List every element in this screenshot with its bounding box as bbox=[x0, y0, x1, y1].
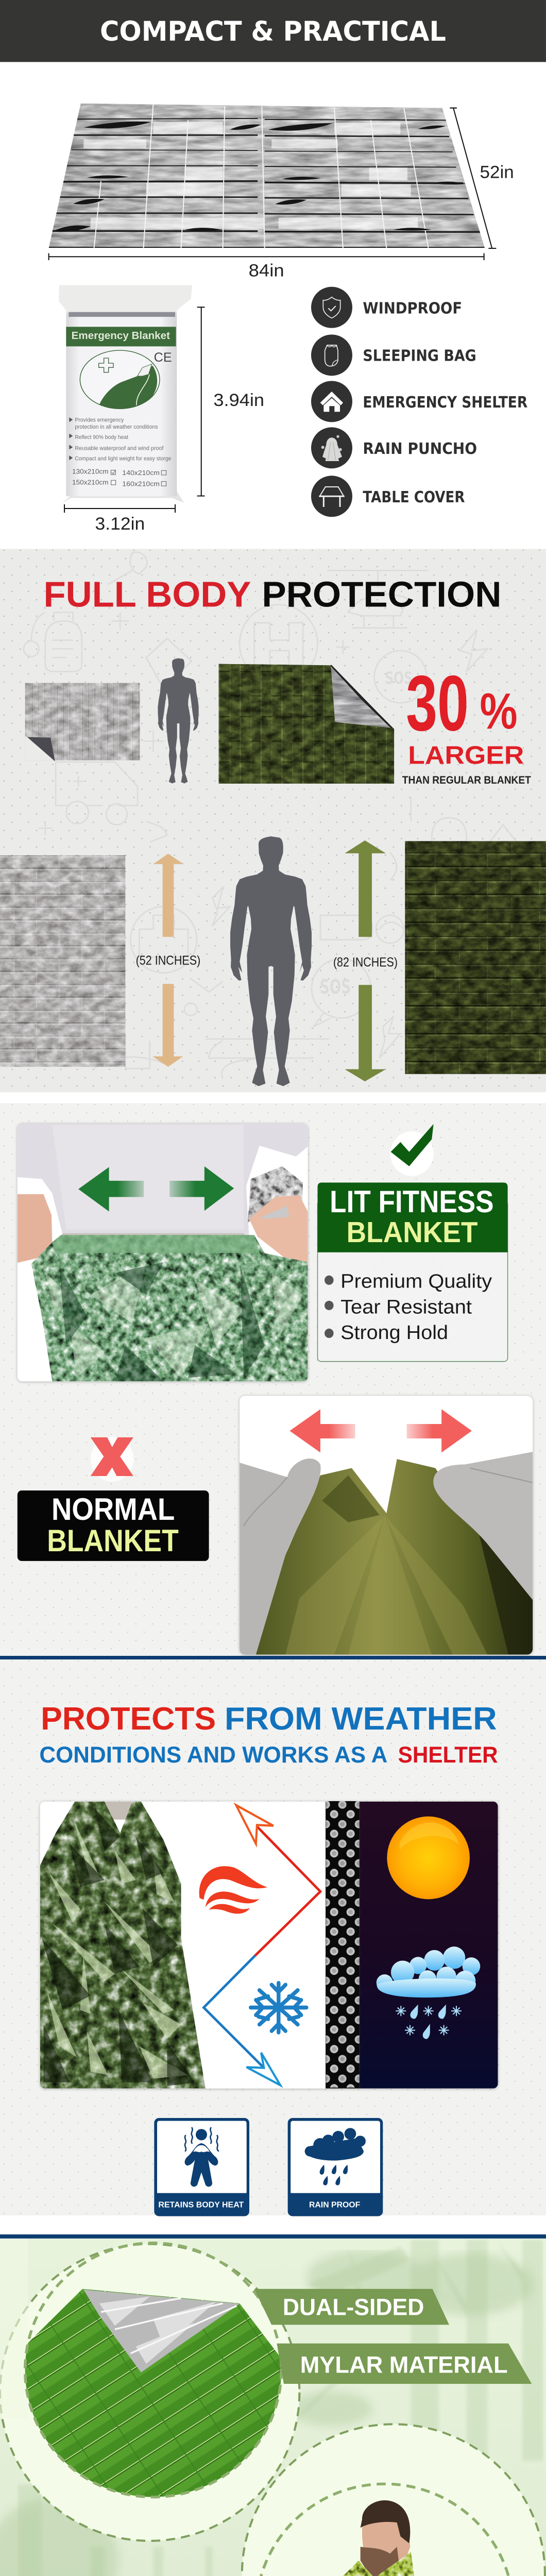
icon: shield bbox=[311, 287, 352, 328]
package title: Emergency Blanket bbox=[72, 330, 170, 342]
header bar bbox=[0, 0, 546, 62]
icons: benefit badges bbox=[154, 2118, 383, 2216]
feature labels: SLEEPING BAG bbox=[363, 347, 476, 365]
icon: sleeping bag bbox=[311, 334, 352, 376]
arrow: red left bbox=[289, 1409, 355, 1452]
ribbon: dual-sided bbox=[254, 2289, 449, 2325]
panel: reflective layer diagram bbox=[40, 1802, 498, 2089]
forest backdrop bbox=[18, 2240, 543, 2576]
arrow: green right bbox=[169, 1166, 234, 1211]
callout: 30 percent larger bbox=[402, 660, 531, 786]
dimension: 52in bbox=[450, 108, 514, 248]
icon: person small bbox=[158, 658, 199, 784]
arrow: red right bbox=[407, 1409, 472, 1452]
feature labels bbox=[363, 299, 527, 506]
section: mylar material bbox=[0, 2239, 546, 2576]
label: normal blanket bbox=[18, 1490, 209, 1561]
package bullets bbox=[69, 417, 171, 462]
dimension: 3.94in bbox=[197, 307, 264, 496]
package sizes: 150x210cm bbox=[72, 479, 109, 486]
package bullets: Compact and light weight for easy storge bbox=[75, 455, 171, 462]
heading bbox=[43, 574, 501, 615]
package bullets: Provides emergency bbox=[75, 417, 124, 423]
package sizes: 130x210cm bbox=[72, 467, 109, 475]
icon: rain poncho bbox=[311, 427, 352, 468]
section: full body protection: SOS bbox=[385, 668, 413, 688]
badge: rain proof: RAIN PROOF bbox=[309, 2200, 361, 2209]
heading: FULL BODY bbox=[43, 574, 251, 615]
icon: sun bbox=[387, 1817, 470, 1899]
icon: house bbox=[311, 381, 352, 422]
section: strength comparison bbox=[0, 1103, 546, 1656]
dimension: 52in: 52in bbox=[480, 162, 514, 182]
ribbon: mylar material bbox=[277, 2344, 532, 2384]
callout: 30 percent larger: % bbox=[480, 683, 518, 739]
heading: FROM WEATHER bbox=[225, 1701, 497, 1736]
feature bullets: Strong Hold bbox=[340, 1321, 448, 1343]
badge: rain proof bbox=[288, 2118, 383, 2216]
arrow: tan height arrow bbox=[152, 854, 183, 1067]
heading: lit fitness: LIT FITNESS bbox=[330, 1184, 494, 1219]
icon: person large bbox=[230, 836, 312, 1086]
arrow: green left bbox=[78, 1167, 144, 1211]
package illustration: CE bbox=[154, 350, 172, 365]
icon: check mark bbox=[390, 1124, 434, 1176]
callout: 30 percent larger: 30 bbox=[406, 660, 469, 748]
section: weather protection bbox=[0, 1659, 546, 2215]
heading: PROTECTS bbox=[41, 1701, 216, 1736]
icon: snowflake bbox=[251, 1983, 306, 2032]
label: normal blanket: NORMAL bbox=[52, 1492, 175, 1527]
dimension: 84in bbox=[49, 253, 484, 281]
package sizes: 160x210cm bbox=[122, 480, 160, 487]
photo: gloves pulling normal blanket bbox=[240, 1396, 533, 1655]
feature labels: TABLE COVER bbox=[363, 488, 465, 506]
green blanket large bbox=[405, 841, 546, 1074]
icon: cloud with snow and rain bbox=[377, 1946, 480, 2039]
arrow: green height arrow bbox=[345, 840, 386, 1081]
reflective dotted layer bbox=[326, 1802, 360, 2089]
feature bullets: Tear Resistant bbox=[340, 1296, 472, 1317]
feature bullets: Premium Quality bbox=[340, 1270, 492, 1292]
callout: 30 percent larger: THAN REGULAR BLANKET bbox=[402, 774, 531, 786]
feature labels: WINDPROOF bbox=[363, 299, 462, 317]
silver blanket large bbox=[0, 855, 125, 1067]
package sizes bbox=[72, 467, 166, 487]
package bullets: Reflect 90% body heat bbox=[75, 434, 128, 440]
photo: dual sided blanket close-up bbox=[21, 2243, 283, 2502]
feature bullets bbox=[325, 1270, 492, 1343]
package bullets: protection in all weather conditions bbox=[75, 424, 158, 430]
package illustration bbox=[80, 350, 172, 411]
arrow: cold reflected bbox=[203, 1956, 280, 2085]
dashed outer shape bbox=[0, 2244, 545, 2576]
section: full body protection bbox=[0, 549, 546, 1092]
section: compact and practical bbox=[0, 0, 546, 549]
dimension: 3.94in: 3.94in bbox=[213, 391, 264, 410]
dimension: 3.12in bbox=[64, 504, 175, 534]
label: 82 inches: (82 INCHES) bbox=[333, 955, 398, 970]
heading: PROTECTION bbox=[262, 574, 501, 615]
dimension: 84in: 84in bbox=[249, 261, 284, 281]
ribbon: dual-sided: DUAL-SIDED bbox=[283, 2294, 424, 2320]
product package bbox=[59, 285, 192, 503]
photo: man wearing foil blanket bbox=[256, 2484, 514, 2576]
title: COMPACT & PRACTICAL bbox=[100, 16, 446, 47]
pearl layer and weather icons bbox=[326, 1801, 480, 2088]
heading: SHELTER bbox=[398, 1742, 498, 1768]
night sky panel bbox=[360, 1802, 498, 2089]
silver blanket photo bbox=[45, 101, 487, 251]
package sizes: 140x210cm bbox=[122, 469, 160, 477]
large green blanket bbox=[219, 664, 394, 784]
pattern: reflective dots bbox=[326, 1801, 360, 2088]
badge: retains body heat bbox=[154, 2118, 249, 2216]
heading: CONDITIONS AND WORKS AS A bbox=[39, 1742, 387, 1768]
arrow: heat reflected bbox=[236, 1805, 320, 1956]
callout: 30 percent larger: LARGER bbox=[408, 741, 524, 769]
ribbon: mylar material: MYLAR MATERIAL bbox=[300, 2352, 508, 2378]
package bullets: Reusable waterproof and wind proof bbox=[75, 445, 164, 451]
panel: lit fitness blanket bbox=[318, 1182, 508, 1362]
heading: blanket: BLANKET bbox=[347, 1216, 478, 1248]
dimension: 3.12in: 3.12in bbox=[95, 514, 145, 534]
section: full body protection: SOS bbox=[320, 976, 351, 998]
icon: red x bbox=[91, 1437, 134, 1482]
badge: retains body heat: RETAINS BODY HEAT bbox=[158, 2200, 244, 2209]
label: 52 inches: (52 INCHES) bbox=[136, 954, 200, 968]
icon: flame bbox=[199, 1866, 267, 1914]
icons: feature badges bbox=[311, 287, 352, 517]
label: normal blanket: BLANKET bbox=[47, 1523, 179, 1558]
divider: navy rule bbox=[0, 2234, 546, 2239]
heading bbox=[39, 1701, 498, 1768]
photo: man wrapped in foil bbox=[40, 1802, 206, 2089]
feature labels: RAIN PUNCHO bbox=[363, 440, 477, 458]
icon: table bbox=[311, 476, 352, 517]
divider: navy rule bbox=[0, 1656, 546, 1659]
photo: hands pulling reinforced blanket bbox=[18, 1124, 308, 1381]
small silver blanket bbox=[25, 683, 140, 761]
